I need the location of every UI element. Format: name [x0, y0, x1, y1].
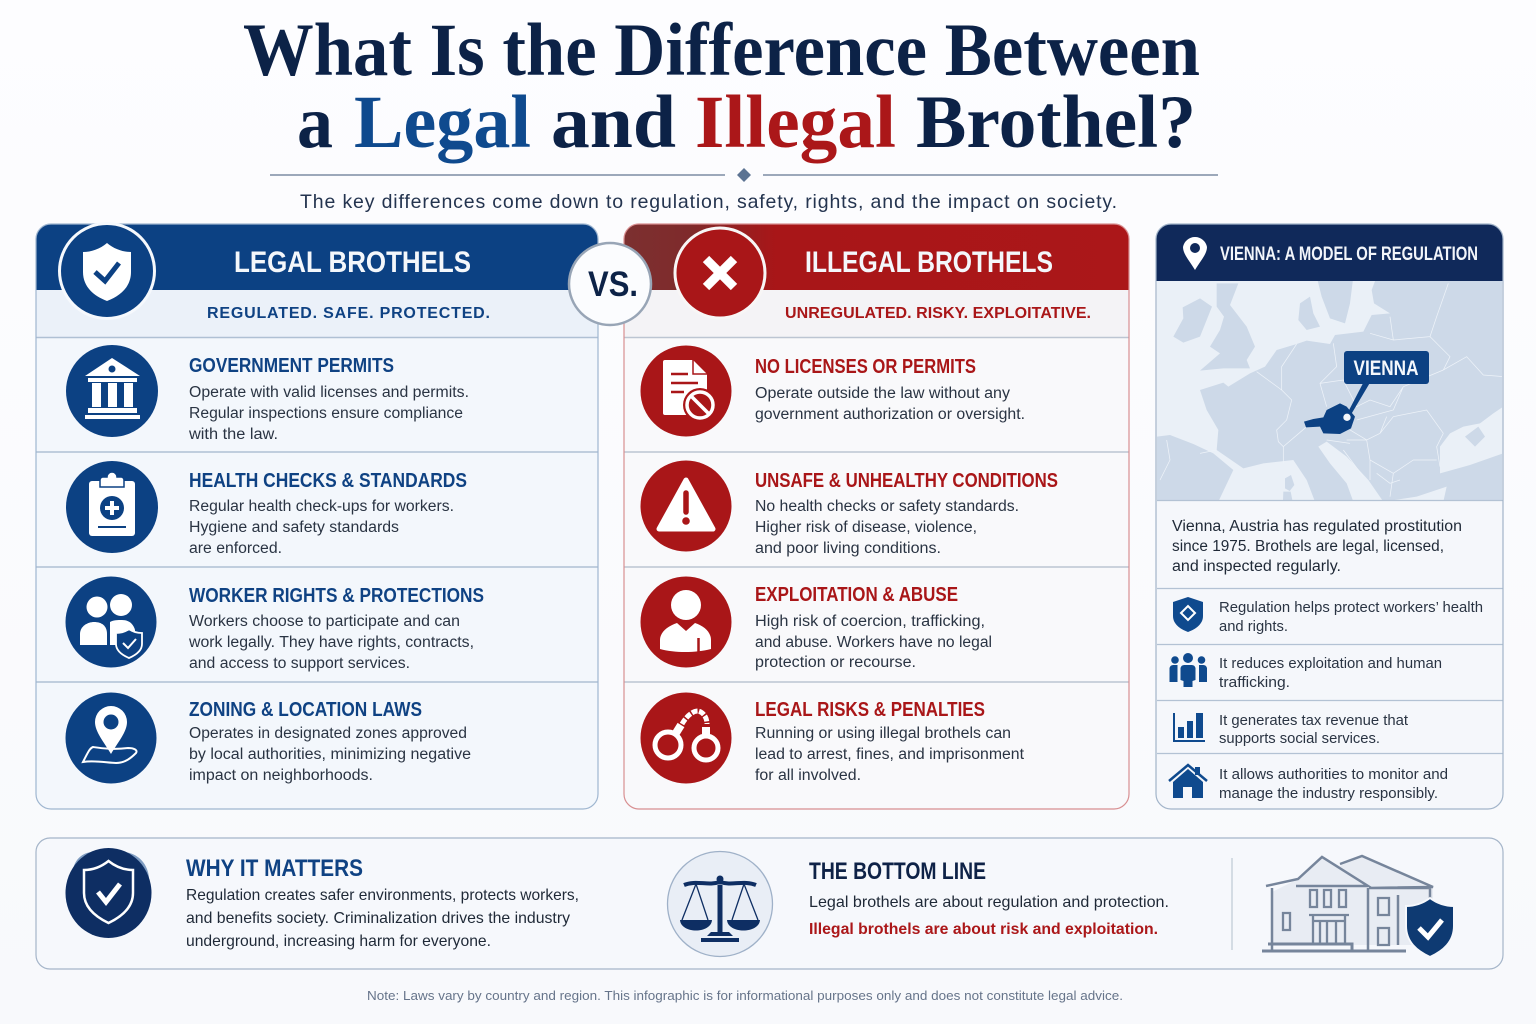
row: unsafe conditions: [640, 460, 1058, 557]
icon: location pin: [1183, 237, 1207, 270]
title: [243, 9, 1200, 164]
icon: x mark: [675, 228, 765, 318]
vienna item: house: It allows authorities to monitor and: [1219, 767, 1448, 783]
row: government permits: Operate with valid licenses and permits.: [189, 384, 469, 401]
vienna item: house: [1169, 765, 1448, 802]
row: no licenses: NO LICENSES OR PERMITS: [755, 356, 976, 378]
vienna text block: since 1975. Brothels are legal, licensed,: [1172, 538, 1444, 555]
panel: illegal brothels: [624, 224, 1129, 809]
heading: illegal brothels: ILLEGAL BROTHELS: [805, 246, 1053, 279]
row: government permits: GOVERNMENT PERMITS: [189, 355, 394, 377]
heading: why it matters: WHY IT MATTERS: [186, 855, 363, 882]
icon: shield check: [60, 224, 154, 318]
vienna item: tax revenue: supports social services.: [1219, 731, 1380, 747]
row: zoning: by local authorities, minimizing negative: [189, 746, 471, 763]
row: exploitation: and abuse. Workers have no legal: [755, 634, 992, 651]
title: and: [551, 81, 676, 164]
row: no licenses: [640, 346, 1025, 436]
row: exploitation: protection or recourse.: [755, 654, 916, 671]
why it matters text: Regulation creates safer environments, protects workers,: [186, 887, 579, 904]
map label: vienna: [1344, 351, 1429, 384]
title: Illegal: [695, 81, 896, 164]
row: legal risks: for all involved.: [755, 767, 861, 784]
row: no licenses: government authorization or oversight.: [755, 406, 1025, 423]
vs badge: VS.: [588, 265, 638, 304]
row: worker rights: work legally. They have rights, contracts,: [188, 634, 474, 651]
row: exploitation: EXPLOITATION & ABUSE: [755, 584, 958, 606]
vienna text block: [1172, 518, 1462, 575]
vienna item: house: manage the industry responsibly.: [1219, 786, 1438, 802]
row: worker rights: [66, 576, 484, 672]
subtitle: The key differences come down to regulation, safety, rights, and the impact on society.: [300, 191, 1117, 213]
row: government permits: Regular inspections ensure compliance: [189, 405, 463, 422]
map label: vienna: VIENNA: [1354, 357, 1418, 380]
vienna text block: Vienna, Austria has regulated prostitution: [1172, 518, 1462, 535]
title: Legal: [354, 81, 531, 164]
row: zoning: [66, 692, 471, 784]
row: unsafe conditions: and poor living conditions.: [755, 540, 941, 557]
row: unsafe conditions: UNSAFE & UNHEALTHY CONDITIONS: [755, 470, 1058, 492]
why it matters text: underground, increasing harm for everyone.: [186, 933, 491, 950]
row: zoning: impact on neighborhoods.: [189, 767, 373, 784]
panel: legal brothels: [36, 224, 598, 809]
why it matters text: and benefits society. Criminalization drives the industry: [186, 910, 570, 927]
row: health checks: Regular health check-ups for workers.: [189, 498, 454, 515]
why it matters text: [186, 887, 579, 950]
footnote: Note: Laws vary by country and region. This infographic is for informational purposes only and does not constitute legal advice.: [367, 989, 1123, 1003]
vienna item: tax revenue: [1174, 713, 1408, 747]
tagline: UNREGULATED. RISKY. EXPLOITATIVE.: [785, 305, 1091, 322]
panel: bottom summary: [36, 838, 1503, 969]
row: exploitation: [640, 576, 992, 671]
vienna item: reduces exploitation: [1170, 653, 1442, 691]
row: worker rights: and access to support services.: [189, 655, 410, 672]
row: health checks: HEALTH CHECKS & STANDARDS: [189, 470, 467, 492]
vs badge: [569, 243, 651, 325]
map of europe: [1155, 277, 1503, 502]
vienna item: health and rights: [1173, 597, 1483, 635]
vienna text block: and inspected regularly.: [1172, 558, 1341, 575]
vienna item: health and rights: Regulation helps protect workers’ health: [1219, 600, 1483, 616]
panel: vienna: [1155, 224, 1503, 809]
bottom line text: Illegal brothels are about risk and exploitation.: [809, 921, 1158, 938]
row: zoning: ZONING & LOCATION LAWS: [189, 699, 422, 721]
vienna item: reduces exploitation: It reduces exploitation and human: [1219, 656, 1442, 672]
row: zoning: Operates in designated zones approved: [189, 725, 467, 742]
row: government permits: with the law.: [188, 426, 278, 443]
row: health checks: [66, 461, 467, 557]
row: government permits: [66, 345, 469, 443]
row: no licenses: Operate outside the law without any: [755, 385, 1010, 402]
title: What Is the Difference Between: [243, 9, 1200, 92]
row: legal risks: Running or using illegal brothels can: [755, 725, 1011, 742]
vienna item: tax revenue: It generates tax revenue that: [1219, 713, 1408, 729]
heading: legal brothels: LEGAL BROTHELS: [234, 246, 471, 279]
row: legal risks: LEGAL RISKS & PENALTIES: [755, 699, 985, 721]
tagline: REGULATED. SAFE. PROTECTED.: [207, 305, 490, 322]
row: unsafe conditions: Higher risk of disease, violence,: [755, 519, 977, 536]
row: health checks: Hygiene and safety standards: [189, 519, 399, 536]
heading: the bottom line: THE BOTTOM LINE: [809, 858, 986, 885]
icon: why it matters shield: [66, 848, 152, 938]
row: health checks: are enforced.: [189, 540, 282, 557]
title: a: [297, 81, 333, 164]
title: Brothel?: [916, 81, 1196, 164]
row: legal risks: [640, 692, 1025, 784]
icon: scales of justice: [668, 852, 772, 956]
row: worker rights: WORKER RIGHTS & PROTECTIONS: [189, 585, 484, 607]
bottom line text: Legal brothels are about regulation and protection.: [809, 894, 1169, 911]
vienna item: reduces exploitation: trafficking.: [1219, 675, 1290, 691]
row: unsafe conditions: No health checks or safety standards.: [755, 498, 1019, 515]
icon: building with shield: [1262, 856, 1454, 957]
vienna item: health and rights: and rights.: [1219, 619, 1288, 635]
row: worker rights: Workers choose to participate and can: [189, 613, 460, 630]
row: legal risks: lead to arrest, fines, and imprisonment: [755, 746, 1025, 763]
row: exploitation: High risk of coercion, trafficking,: [755, 613, 985, 630]
bottom line text: [809, 894, 1169, 938]
